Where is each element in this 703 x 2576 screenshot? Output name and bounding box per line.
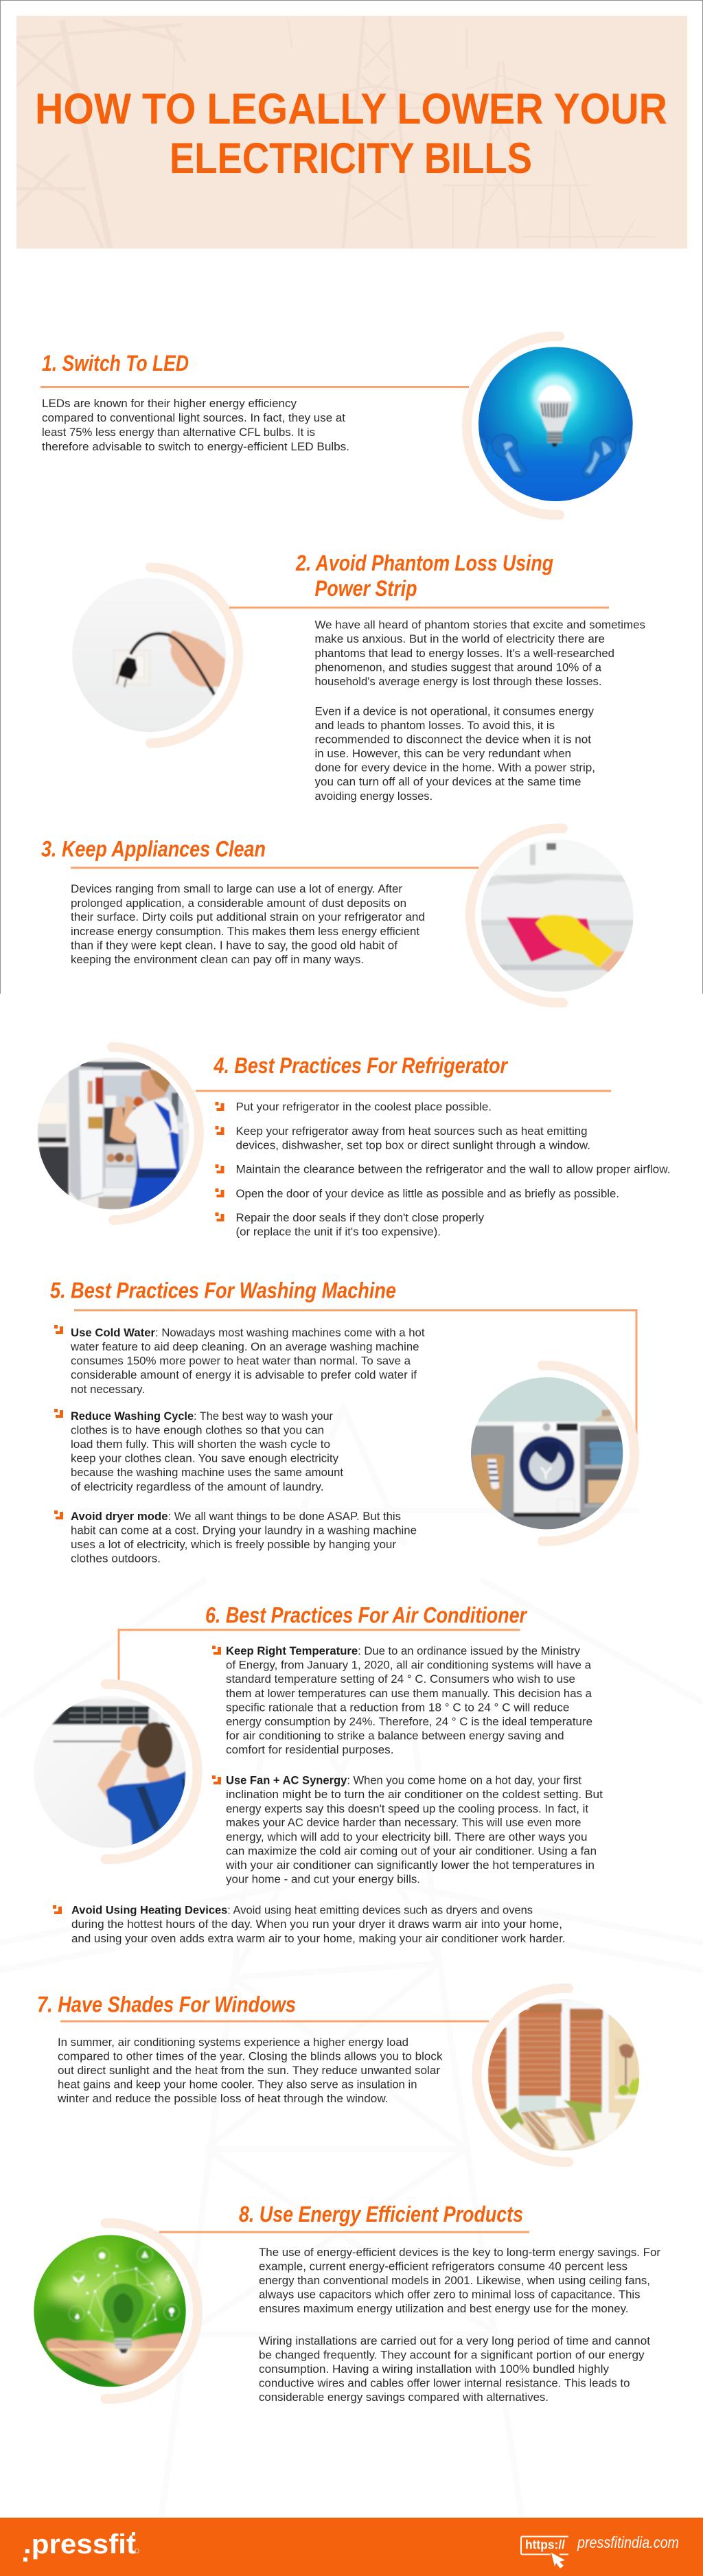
text 2: make us anxious. But in the world of electricity there are	[314, 633, 605, 645]
text 8: The use of energy-efficient devices is the key to long-term energy savings. For	[259, 2246, 661, 2259]
list 6: and using your oven adds extra warm air to your home, making your air conditioner work harder.	[71, 1933, 566, 1945]
list 6: inclination might be to turn the air conditioner on the coldest setting. But	[226, 1789, 603, 1801]
rule 3	[71, 866, 479, 869]
list 6: energy experts say this doesn't speed up the cooling process. In fact, it	[226, 1803, 588, 1815]
logo: .pressfit	[23, 2529, 136, 2560]
list 5: not necessary.	[71, 1383, 145, 1396]
list 6: standard temperature setting of 24 ° C. Consumers who wish to use	[226, 1673, 575, 1686]
list 5	[70, 1326, 425, 1565]
text 7: out direct sunlight and the heat from the sun. They reduce unwanted solar	[58, 2065, 441, 2077]
text 2: phantoms that lead to energy losses. It's a well-researched	[314, 647, 614, 660]
text 3: than if they were kept clean. I have to say, the good old habit of	[71, 939, 397, 952]
photo: window blinds	[487, 1999, 640, 2151]
text 2: avoiding energy losses.	[314, 790, 433, 803]
heading 2: 2. Avoid Phantom Loss Using	[295, 551, 553, 575]
text 8: always use capacitors which offer zero to minimal loss of capacitance. This	[259, 2289, 640, 2301]
text 7: winter and reduce the possible loss of heat through the window.	[57, 2093, 389, 2105]
bullets 5	[54, 1325, 63, 1519]
page border	[0, 0, 703, 994]
list 4: Keep your refrigerator away from heat sources such as heat emitting	[236, 1125, 588, 1138]
list 5: considerable amount of energy it is advisable to prefer cold water if	[71, 1369, 417, 1381]
list 4: devices, dishwasher, set top box or direct sunlight through a window.	[236, 1140, 590, 1152]
list 5: consumes 150% more power to heat water than normal. To save a	[71, 1355, 411, 1368]
text 1	[42, 398, 349, 453]
list 6: energy consumption by 24%. Therefore, 24 ° C is the ideal temperature	[226, 1716, 592, 1728]
arc 4	[112, 1047, 199, 1220]
list 4: Put your refrigerator in the coolest place possible.	[236, 1101, 492, 1114]
rule 7	[60, 2020, 489, 2023]
section 5: washing machine	[50, 1278, 636, 1565]
rule 2	[229, 607, 609, 608]
rule 8	[159, 2231, 529, 2233]
list 5: Reduce Washing Cycle: The best way to wash your	[71, 1410, 333, 1423]
list 6: specific rationale that a reduction from 18 ° C to 24 ° C will reduce	[226, 1701, 570, 1714]
section 3: keep appliances clean	[41, 828, 636, 1002]
list 5: clothes is to have enough clothes so that you can	[71, 1424, 324, 1436]
list 6	[71, 1645, 603, 1945]
text 2: in use. However, this can be very redundant when	[314, 748, 571, 760]
rule 4	[196, 1090, 611, 1092]
section 8: energy efficient products	[31, 2202, 661, 2404]
arc 6	[106, 1684, 198, 1859]
rule 5	[74, 1310, 636, 1435]
title	[35, 85, 667, 183]
photo: unplugged cable	[72, 577, 227, 733]
arc 1	[467, 336, 560, 515]
heading 2	[295, 551, 553, 601]
list 6: energy, which will add to your electricity bill. There are other ways you	[226, 1831, 588, 1843]
website link icon	[521, 2536, 568, 2568]
text 7: heat gains and keep your home cooler. They also serve as insulation in	[58, 2079, 417, 2091]
photo: cleaning a fridge	[481, 839, 636, 993]
list 6: comfort for residential purposes.	[226, 1744, 394, 1756]
text 3: their surface. Dirty coils put additional strain on your refrigerator and	[71, 911, 425, 923]
background watermark: transmission tower	[0, 1407, 703, 2517]
text 1: therefore advisable to switch to energy-efficient LED Bulbs.	[42, 441, 349, 453]
text 8: considerable energy savings compared with alternatives.	[259, 2391, 549, 2404]
photo: green bulb in hand	[34, 2235, 186, 2387]
header tower silhouettes	[65, 32, 515, 207]
text 3: prolonged application, a considerable amount of dust deposits on	[71, 897, 406, 910]
text 7: In summer, air conditioning systems experience a higher energy load	[58, 2036, 408, 2049]
title: ELECTRICITY BILLS	[170, 135, 532, 183]
arc 7	[477, 1988, 568, 2162]
bullets 6	[53, 1646, 221, 1914]
text 2: you can turn off all of your devices at the same time	[314, 776, 581, 788]
website link icon: https://	[525, 2538, 565, 2551]
arc 2	[150, 567, 238, 743]
text 8: be changed frequently. They account for a significant portion of our energy	[259, 2349, 645, 2362]
rule 6	[119, 1630, 520, 1682]
text 8: example, current energy-efficient refrigerators consume 40 percent less	[259, 2260, 627, 2273]
list 5: uses a lot of electricity, which is freely possible by hanging your	[71, 1539, 397, 1551]
rule 1	[41, 386, 469, 388]
text 7	[57, 2036, 443, 2105]
list 6: of Energy, from January 1, 2020, all air conditioning systems will have a	[226, 1659, 592, 1671]
section 1: switch to LED	[41, 336, 638, 515]
list 6: for air conditioning to strike a balance between energy saving and	[226, 1730, 564, 1743]
text 8: conductive wires and cables offer lower internal resistance. This leads to	[259, 2377, 630, 2389]
heading 6: 6. Best Practices For Air Conditioner	[205, 1602, 527, 1627]
text 3	[71, 883, 425, 966]
text 8	[259, 2246, 661, 2404]
photo: LED bulb	[479, 347, 633, 501]
list 6: during the hottest hours of the day. When you run your dryer it draws warm air into your home,	[71, 1918, 562, 1931]
list 5: habit can come at a cost. Drying your laundry in a washing machine	[71, 1524, 417, 1537]
photo: washing machine	[471, 1377, 623, 1530]
list 4: Maintain the clearance between the refrigerator and the wall to allow proper airflow.	[236, 1163, 670, 1175]
list 5: of electricity regardless of the amount of laundry.	[71, 1481, 324, 1493]
text 3: Devices ranging from small to large can use a lot of energy. After	[71, 883, 403, 895]
heading 5: 5. Best Practices For Washing Machine	[50, 1278, 396, 1303]
list 6: your home - and cut your energy bills.	[226, 1873, 420, 1885]
text 2: Even if a device is not operational, it consumes energy	[314, 706, 595, 718]
bullets 4	[216, 1102, 224, 1221]
section 2: phantom loss	[72, 551, 645, 803]
text 2: recommended to disconnect the device when it is not	[314, 733, 591, 746]
text 8: energy than conventional models in 2001. Likewise, when using ceiling fans,	[259, 2275, 650, 2287]
list 5: load them fully. This will shorten the wash cycle to	[71, 1438, 330, 1451]
heading 7: 7. Have Shades For Windows	[37, 1992, 296, 2017]
text 2: household's average energy is lost through these losses.	[314, 676, 601, 688]
photo: AC technician	[34, 1697, 186, 1848]
arc 5	[542, 1366, 634, 1541]
list 4: (or replace the unit if it's too expensive).	[236, 1226, 441, 1239]
list 4	[236, 1101, 670, 1239]
section 6: air conditioner	[31, 1602, 603, 1945]
heading 2: Power Strip	[314, 576, 417, 601]
text 8: ensures maximum energy utilization and best energy use for the money.	[259, 2303, 629, 2315]
text 2: phenomenon, and studies suggest that around 10% of a	[314, 662, 602, 674]
list 4: Open the door of your device as little as possible and as briefly as possible.	[236, 1188, 619, 1200]
list 6: makes your AC device harder than necessary. This will use even more	[226, 1817, 581, 1829]
arc 3	[470, 828, 563, 1002]
text 7: compared to other times of the year. Closing the blinds allows you to block	[58, 2050, 443, 2062]
list 5: water feature to aid deep cleaning. On an average washing machine	[70, 1341, 419, 1353]
heading 3: 3. Keep Appliances Clean	[41, 836, 266, 861]
text 8: Wiring installations are carried out for a very long period of time and cannot	[259, 2335, 650, 2347]
section 7: shades for windows	[37, 1988, 649, 2162]
photo: technician at fridge	[37, 1057, 189, 1210]
text 1: least 75% less energy than alternative CFL bulbs. It is	[42, 426, 315, 439]
list 5: keep your clothes clean. You save enough electricity	[71, 1453, 339, 1465]
heading 4: 4. Best Practices For Refrigerator	[214, 1053, 508, 1078]
text 3: keeping the environment clean can pay off in many ways.	[71, 954, 364, 966]
header banner	[16, 16, 687, 257]
arc 8	[106, 2223, 198, 2399]
website address: pressfitindia.com	[577, 2533, 679, 2551]
list 6: Use Fan + AC Synergy: When you come home on a hot day, your first	[226, 1774, 581, 1786]
list 4: Repair the door seals if they don't close properly	[236, 1212, 485, 1224]
list 6: Keep Right Temperature: Due to an ordinance issued by the Ministry	[226, 1645, 581, 1657]
list 6: can maximize the cold air coming out of your air conditioner. Using a fan	[226, 1845, 597, 1858]
list 6: them at lower temperatures can use them manually. This decision has a	[226, 1688, 592, 1700]
section 4: refrigerator	[34, 1047, 670, 1239]
text 1: LEDs are known for their higher energy efficiency	[42, 398, 297, 410]
footer	[0, 2518, 703, 2576]
list 5: Avoid dryer mode: We all want things to be done ASAP. But this	[71, 1510, 401, 1523]
text 2: We have all heard of phantom stories that excite and sometimes	[314, 619, 645, 632]
list 5: because the washing machine uses the same amount	[71, 1467, 343, 1479]
heading 1: 1. Switch To LED	[42, 351, 189, 376]
list 6: with your air conditioner can significantly lower the hot temperatures in	[225, 1859, 595, 1872]
text 1: compared to conventional light sources. In fact, they use at	[42, 412, 345, 424]
text 2: and leads to phantom losses. To avoid this, it is	[314, 720, 555, 732]
list 5: clothes outdoors.	[71, 1553, 161, 1565]
text 8: consumption. Having a wiring installation with 100% bundled highly	[259, 2363, 610, 2376]
text 2: done for every device in the home. With a power strip,	[314, 762, 595, 774]
heading 8: 8. Use Energy Efficient Products	[239, 2202, 523, 2227]
list 6: Avoid Using Heating Devices: Avoid using heat emitting devices such as dryers and ovens	[71, 1905, 533, 1917]
text 2	[314, 619, 645, 803]
list 5: Use Cold Water: Nowadays most washing machines come with a hot	[71, 1326, 425, 1339]
text 3: increase energy consumption. This makes them less energy efficient	[71, 925, 419, 938]
